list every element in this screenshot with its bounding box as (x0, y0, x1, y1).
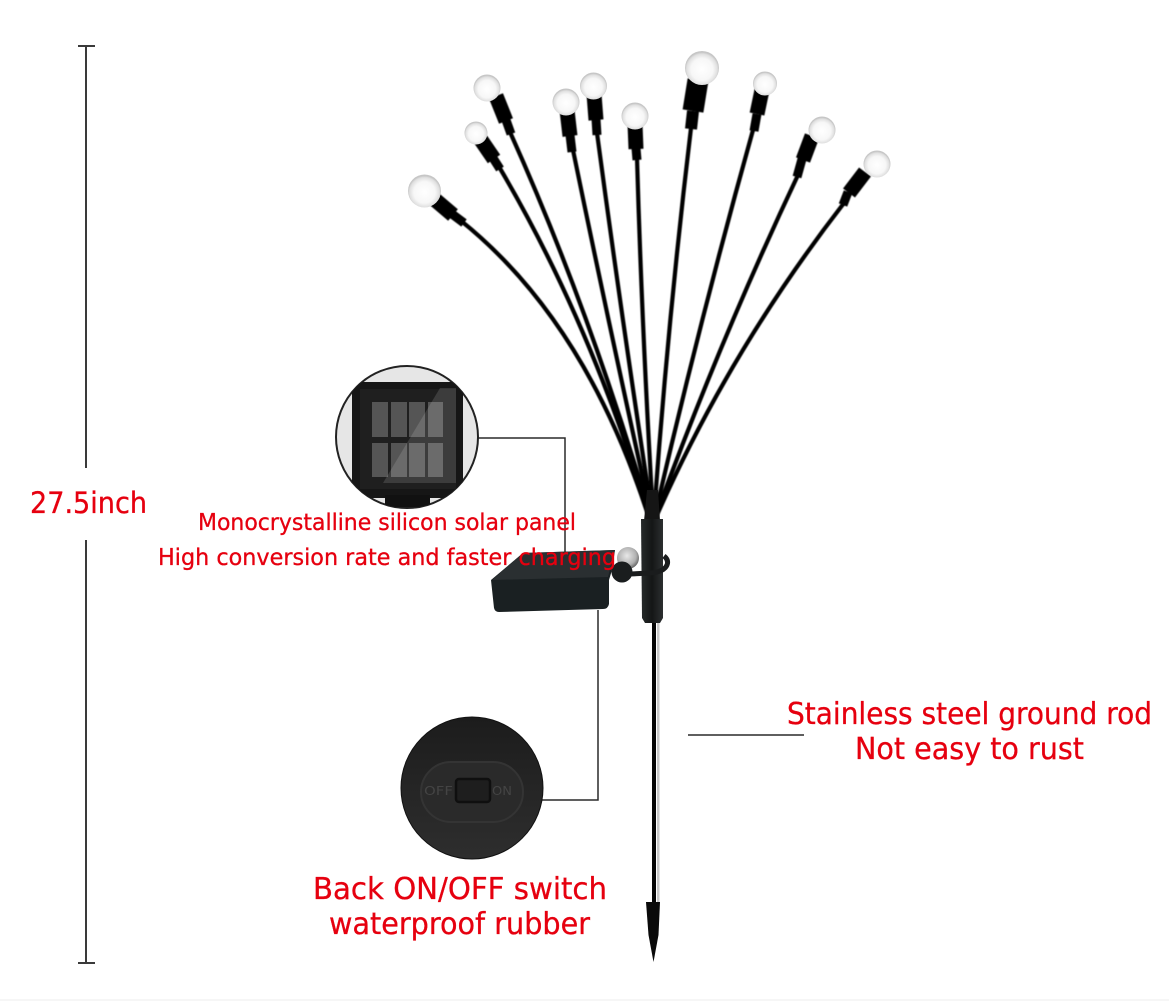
bracket ring and ball joint (612, 547, 668, 582)
stem neck (644, 490, 660, 521)
sockets (433, 80, 865, 223)
rod callout line (688, 734, 804, 736)
solar panel box (491, 550, 615, 612)
light stems (460, 128, 844, 515)
inset: rubber switch close-up: ON (492, 784, 512, 798)
bottom edge tint (0, 999, 1169, 1001)
label: solar panel: Monocrystalline silicon solar panel (198, 510, 576, 536)
rod tip (646, 902, 660, 962)
inset: solar panel close-up (336, 366, 478, 508)
central hub (641, 519, 663, 623)
label: ground rod: Stainless steel ground rod (787, 697, 1152, 732)
label: ground rod: Not easy to rust (855, 732, 1084, 767)
label: solar panel: High conversion rate and faster charging (158, 545, 616, 571)
dimension label: 27.5inch (30, 486, 147, 520)
ground rod (652, 620, 660, 905)
inset: rubber switch close-up (401, 717, 543, 859)
label: switch: Back ON/OFF switch (313, 872, 607, 907)
dimension line: height (78, 46, 95, 963)
bulbs (408, 51, 890, 208)
label: ground rod (787, 697, 1152, 767)
label: solar panel (158, 510, 616, 571)
inset: rubber switch close-up: OFF (424, 784, 453, 798)
label: switch (313, 872, 607, 942)
connector lines (478, 438, 598, 800)
label: switch: waterproof rubber (329, 907, 591, 942)
